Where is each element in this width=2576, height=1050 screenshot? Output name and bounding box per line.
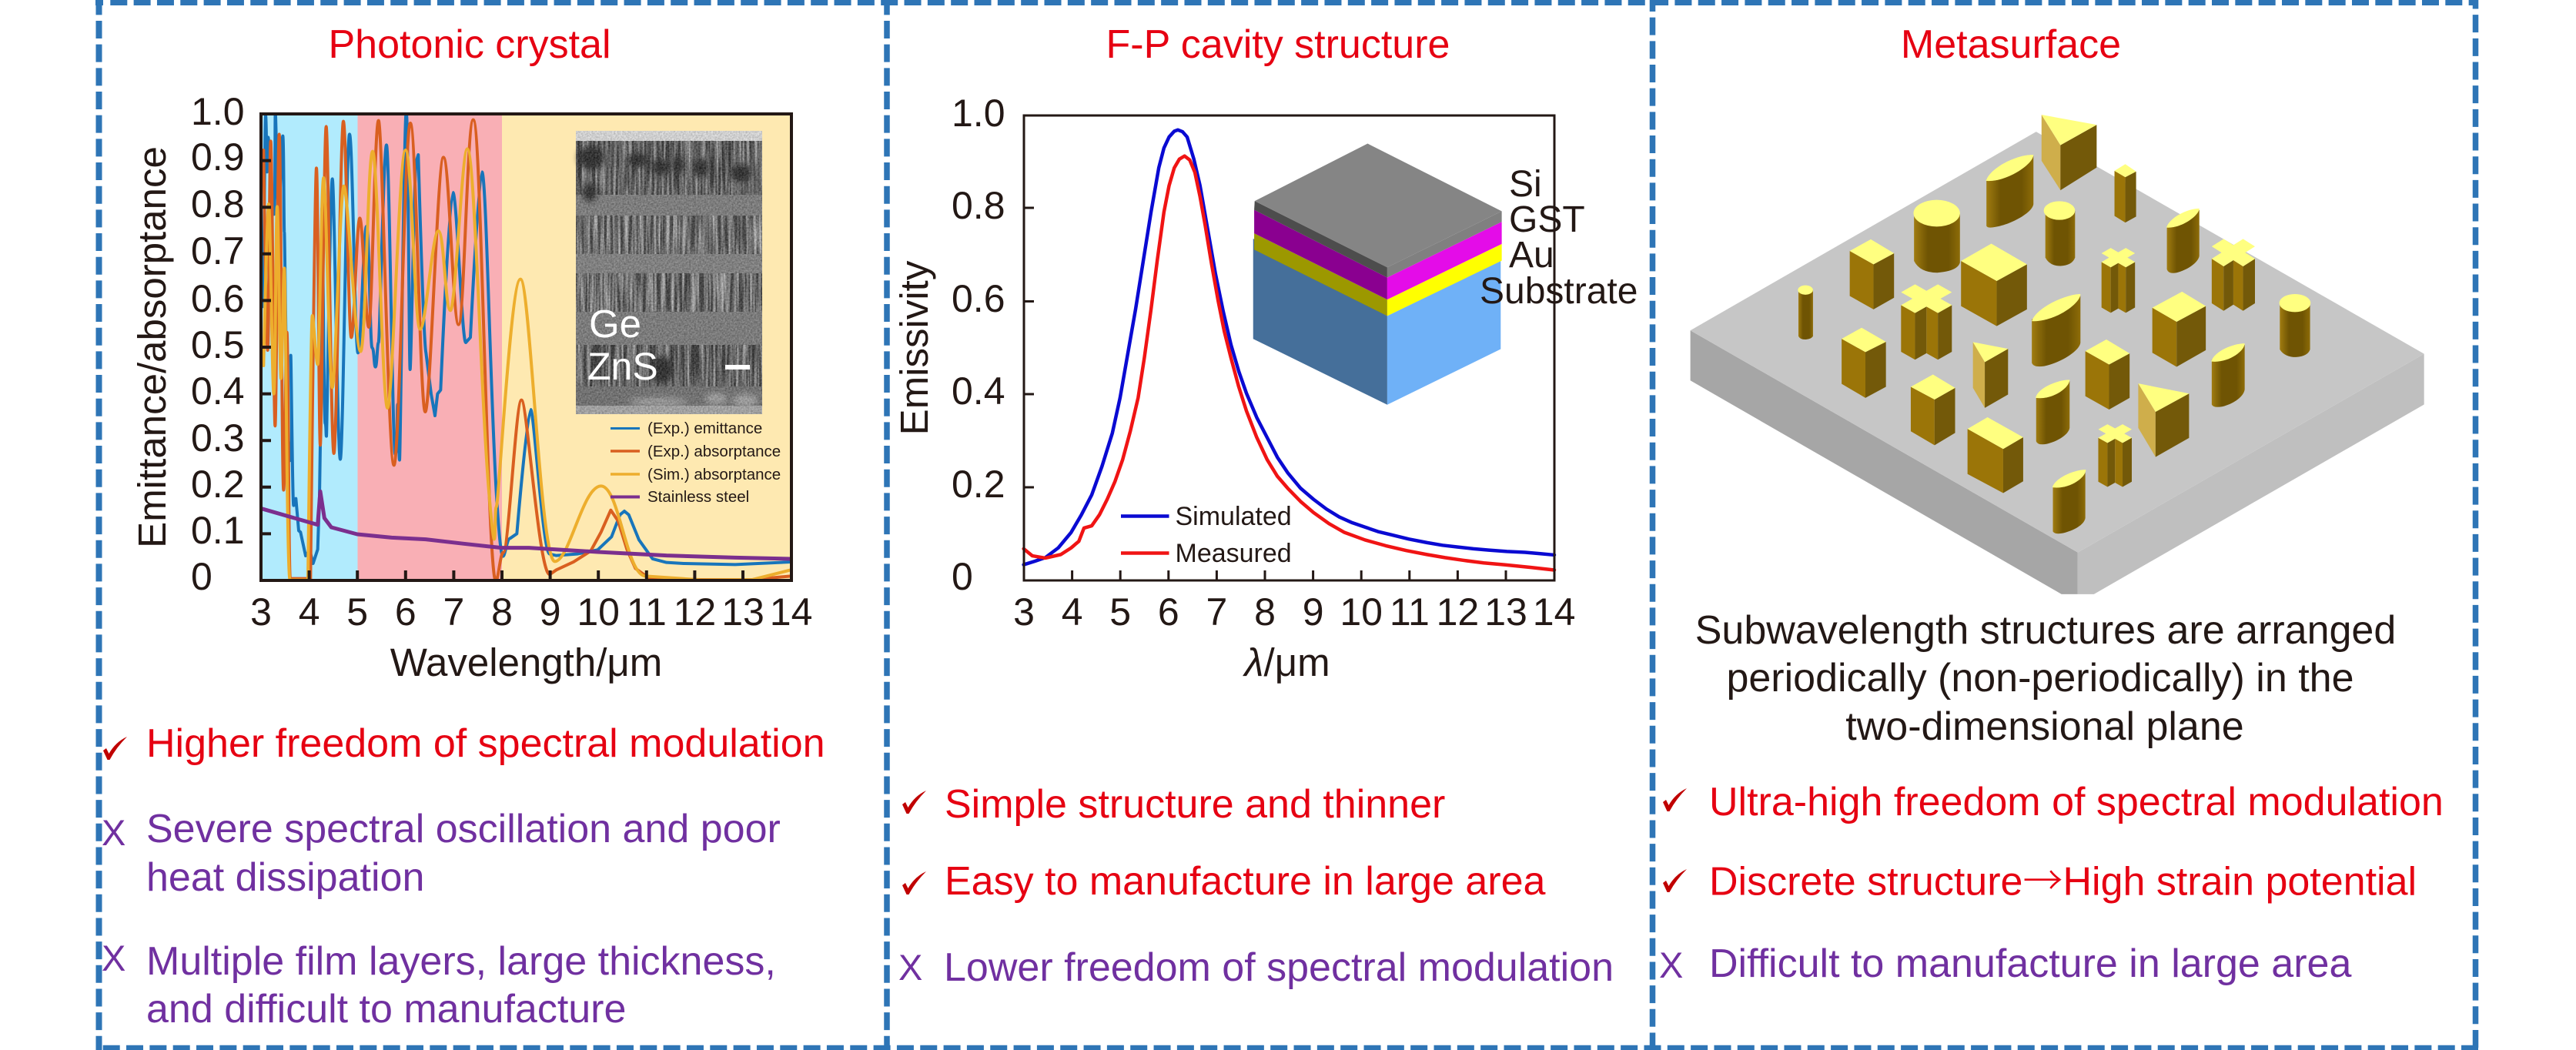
spectral curves	[262, 112, 791, 581]
curve: simulated	[1024, 130, 1554, 565]
heading: F-P cavity structure: F-P cavity structure	[1106, 22, 1450, 67]
x axis tick labels: 8	[1254, 590, 1276, 634]
description text: two-dimensional plane	[1845, 704, 2244, 749]
y axis tick labels: 0.8	[191, 182, 245, 226]
panel: F-P cavity structure	[892, 22, 1638, 990]
description text: periodically (non-periodically) in the	[1726, 656, 2354, 701]
cross mark: X	[102, 938, 125, 978]
legend: (Exp.) absorptance	[647, 443, 781, 460]
cross mark: X	[898, 947, 922, 988]
advantage: Simple structure and thinner	[945, 782, 1445, 827]
panel: photonic crystal	[102, 22, 825, 1032]
y axis tick labels: 0.2	[191, 463, 245, 506]
advantage: Easy to manufacture in large area	[945, 859, 1546, 904]
plot frame and ticks	[261, 114, 791, 580]
y axis title: Emittance/absorptance	[130, 146, 174, 548]
x axis tick labels: 11	[627, 590, 667, 634]
description text	[1695, 608, 2396, 749]
layer labels	[1480, 164, 1638, 312]
layer labels: GST	[1509, 199, 1585, 240]
SEM image inset: Ge	[589, 302, 641, 346]
x axis tick labels: 10	[577, 590, 620, 634]
chart: emissivity spectrum	[892, 92, 1638, 684]
y axis tick labels: 1.0	[191, 90, 245, 133]
curve: experimental emittance	[263, 112, 791, 564]
x axis tick labels: 9	[540, 590, 561, 634]
heading: metasurface: Metasurface	[1901, 22, 2121, 67]
y axis tick labels: 0.4	[191, 370, 245, 413]
check icon	[902, 791, 926, 814]
spectral band: 8-14 um	[502, 114, 791, 580]
plot frame and ticks	[1024, 115, 1554, 580]
check icon	[1663, 788, 1687, 811]
x axis tick labels: 13	[721, 590, 764, 634]
check icon	[902, 871, 926, 895]
x axis tick labels: 3	[250, 590, 272, 634]
chart: emittance and absorptance spectra	[130, 90, 812, 684]
x axis tick labels: 4	[299, 590, 320, 634]
layer labels: Substrate	[1480, 271, 1638, 312]
x axis tick labels: 7	[443, 590, 464, 634]
layer labels: Au	[1509, 235, 1554, 276]
x axis tick labels: 4	[1062, 590, 1083, 634]
x axis tick labels: 10	[1340, 590, 1383, 634]
y axis tick labels: 0.7	[191, 229, 245, 273]
SEM image inset: ZnS	[587, 345, 658, 388]
diagram: layered F-P stack	[1253, 144, 1502, 405]
advantage: Ultra-high freedom of spectral modulation	[1709, 780, 2444, 824]
curve: measured	[1024, 156, 1554, 570]
check icon	[103, 737, 127, 760]
curve: stainless steel	[262, 491, 791, 559]
disadvantage: Multiple film layers, large thickness,	[146, 939, 776, 984]
disadvantage: Severe spectral oscillation and poor	[146, 807, 781, 851]
y axis tick labels: 0.2	[952, 463, 1005, 506]
disadvantage: heat dissipation	[146, 855, 424, 900]
advantage: Higher freedom of spectral modulation	[146, 721, 825, 766]
legend: Measured	[1175, 539, 1292, 568]
legend: (Sim.) absorptance	[647, 466, 781, 483]
y axis tick labels	[191, 90, 245, 598]
x axis tick labels: 6	[395, 590, 417, 634]
y axis tick labels: 0.3	[191, 416, 245, 460]
x axis tick labels: 12	[674, 590, 716, 634]
pros and cons: metasurface	[1659, 780, 2444, 986]
disadvantage: Difficult to manufacture in large area	[1709, 941, 2351, 986]
x axis tick labels	[1013, 590, 1575, 634]
y axis tick labels: 0.4	[952, 370, 1005, 413]
legend	[611, 420, 781, 506]
y axis tick labels: 1.0	[952, 92, 1005, 135]
disadvantage: and difficult to manufacture	[146, 987, 626, 1032]
panel: metasurface	[1659, 22, 2444, 986]
y axis tick labels: 0.8	[952, 184, 1005, 227]
disadvantage	[146, 807, 781, 900]
check icon	[1663, 869, 1687, 892]
cross mark: X	[102, 812, 125, 853]
legend: Simulated	[1175, 502, 1292, 531]
x axis tick labels	[250, 590, 812, 634]
description text: Subwavelength structures are arranged	[1695, 608, 2396, 653]
y axis tick labels: 0.9	[191, 135, 245, 179]
cross mark: X	[1659, 945, 1683, 985]
y axis tick labels: 0.6	[952, 277, 1005, 320]
y axis tick labels	[952, 92, 1005, 598]
legend: (Exp.) emittance	[647, 420, 762, 437]
SEM image inset	[576, 131, 762, 414]
spectral band: 5-8 um	[357, 114, 502, 580]
x axis tick labels: 11	[1390, 590, 1430, 634]
x axis tick labels: 8	[491, 590, 513, 634]
curve: experimental absorptance	[263, 120, 791, 581]
diagram: metasurface pillars on substrate	[1691, 115, 2424, 594]
x axis tick labels: 3	[1013, 590, 1035, 634]
layer labels: Si	[1509, 164, 1542, 205]
x axis tick labels: 5	[346, 590, 368, 634]
y axis tick labels: 0.1	[191, 509, 245, 552]
y axis tick labels: 0	[952, 555, 973, 598]
x axis tick labels: 12	[1437, 590, 1479, 634]
x axis tick labels: 7	[1206, 590, 1227, 634]
x axis tick labels: 5	[1109, 590, 1131, 634]
advantage: Discrete structure→High strain potential	[1709, 848, 2417, 907]
x axis tick labels: 14	[770, 590, 812, 634]
x axis title: Wavelength/μm	[390, 640, 662, 684]
substrate plate	[1691, 132, 2424, 594]
y axis tick labels: 0.6	[191, 277, 245, 320]
legend: Stainless steel	[647, 488, 749, 506]
simulated and measured curves	[1024, 130, 1554, 570]
x axis tick labels: 14	[1533, 590, 1575, 634]
pros and cons: F-P cavity	[898, 782, 1614, 990]
y axis tick labels: 0.5	[191, 323, 245, 366]
y axis title: Emissivity	[892, 260, 936, 435]
heading: photonic crystal: Photonic crystal	[328, 22, 611, 67]
y axis tick labels: 0	[191, 555, 212, 598]
pros and cons: photonic crystal	[102, 721, 825, 1032]
legend	[1121, 502, 1292, 568]
spectral band: 3-5 um	[261, 114, 357, 580]
square, round, elliptical, triangular and cross pillars	[1798, 115, 2310, 533]
x axis tick labels: 9	[1303, 590, 1324, 634]
x axis title: λ/μm	[1242, 640, 1330, 684]
disadvantage	[146, 939, 776, 1032]
x axis tick labels: 13	[1484, 590, 1527, 634]
x axis tick labels: 6	[1158, 590, 1179, 634]
curve: simulated absorptance	[263, 149, 791, 580]
disadvantage: Lower freedom of spectral modulation	[944, 945, 1614, 990]
